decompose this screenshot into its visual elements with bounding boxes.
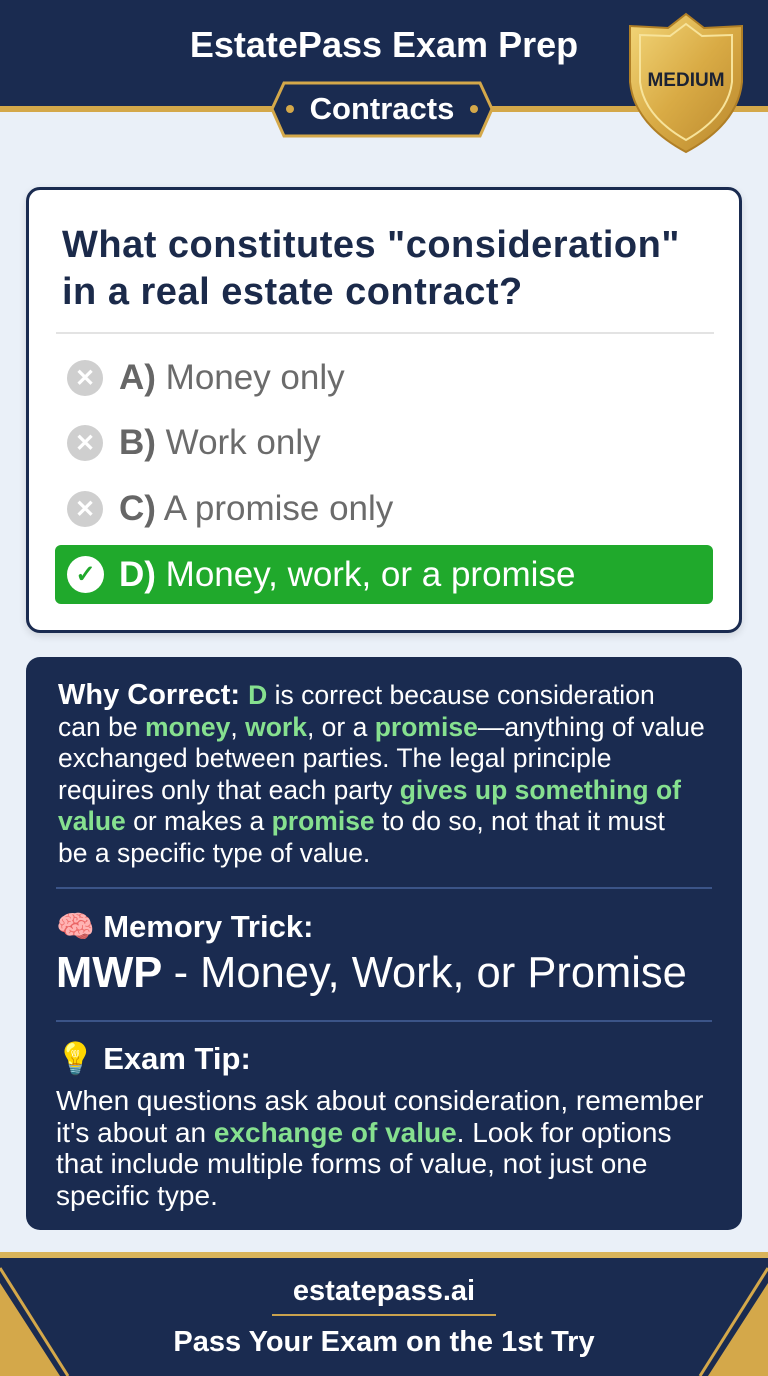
category badge: Contracts: [272, 82, 492, 138]
memory trick: 🧠 Memory Trick:: [56, 909, 313, 944]
explanation panel: [26, 657, 742, 1230]
question text: What constitutes "consideration": [62, 224, 680, 266]
option C: ✕: [75, 496, 95, 522]
exam tip: [56, 1041, 703, 1211]
badge: MEDIUM shield: MEDIUM: [647, 70, 725, 91]
category badge: Contracts: Contracts: [310, 91, 454, 126]
why correct: exchanged between parties. The legal principle: [58, 743, 611, 773]
why correct: Why Correct: D is correct because consideration: [58, 679, 655, 711]
title: EstatePass Exam Prep: [190, 24, 578, 65]
why correct: [58, 679, 705, 868]
option B: B) Work only: [119, 423, 321, 462]
memory trick: MWP - Money, Work, or Promise: [56, 949, 687, 997]
question card: [26, 187, 742, 633]
option D correct: ✓: [75, 561, 96, 588]
footer url: estatepass.ai: [293, 1275, 475, 1307]
why correct: can be money, work, or a promise—anything of value: [58, 712, 705, 742]
option A: A) Money only: [119, 358, 345, 397]
why correct: be a specific type of value.: [58, 838, 370, 868]
exam tip: specific type.: [56, 1180, 218, 1210]
exam tip: When questions ask about consideration, remember: [56, 1085, 703, 1116]
option A: ✕: [75, 364, 95, 392]
why correct: value or makes a promise to do so, not that it must: [58, 806, 665, 836]
why correct: requires only that each party gives up something of: [58, 774, 681, 804]
header band: [0, 0, 768, 112]
memory trick: [56, 909, 687, 997]
question text: in a real estate contract?: [62, 271, 523, 313]
option D correct: [55, 545, 713, 604]
exam tip: it's about an exchange of value. Look for options: [56, 1116, 671, 1148]
footer: [0, 1252, 768, 1376]
option B: ✕: [75, 430, 95, 456]
badge: MEDIUM shield: [629, 12, 743, 154]
footer tagline: Pass Your Exam on the 1st Try: [173, 1326, 595, 1358]
question text: [62, 224, 680, 313]
exam tip: that include multiple forms of value, not just one: [56, 1148, 647, 1179]
option D correct: D) Money, work, or a promise: [119, 554, 575, 594]
option C: C) A promise only: [119, 489, 393, 528]
exam tip: 💡 Exam Tip:: [56, 1041, 251, 1076]
